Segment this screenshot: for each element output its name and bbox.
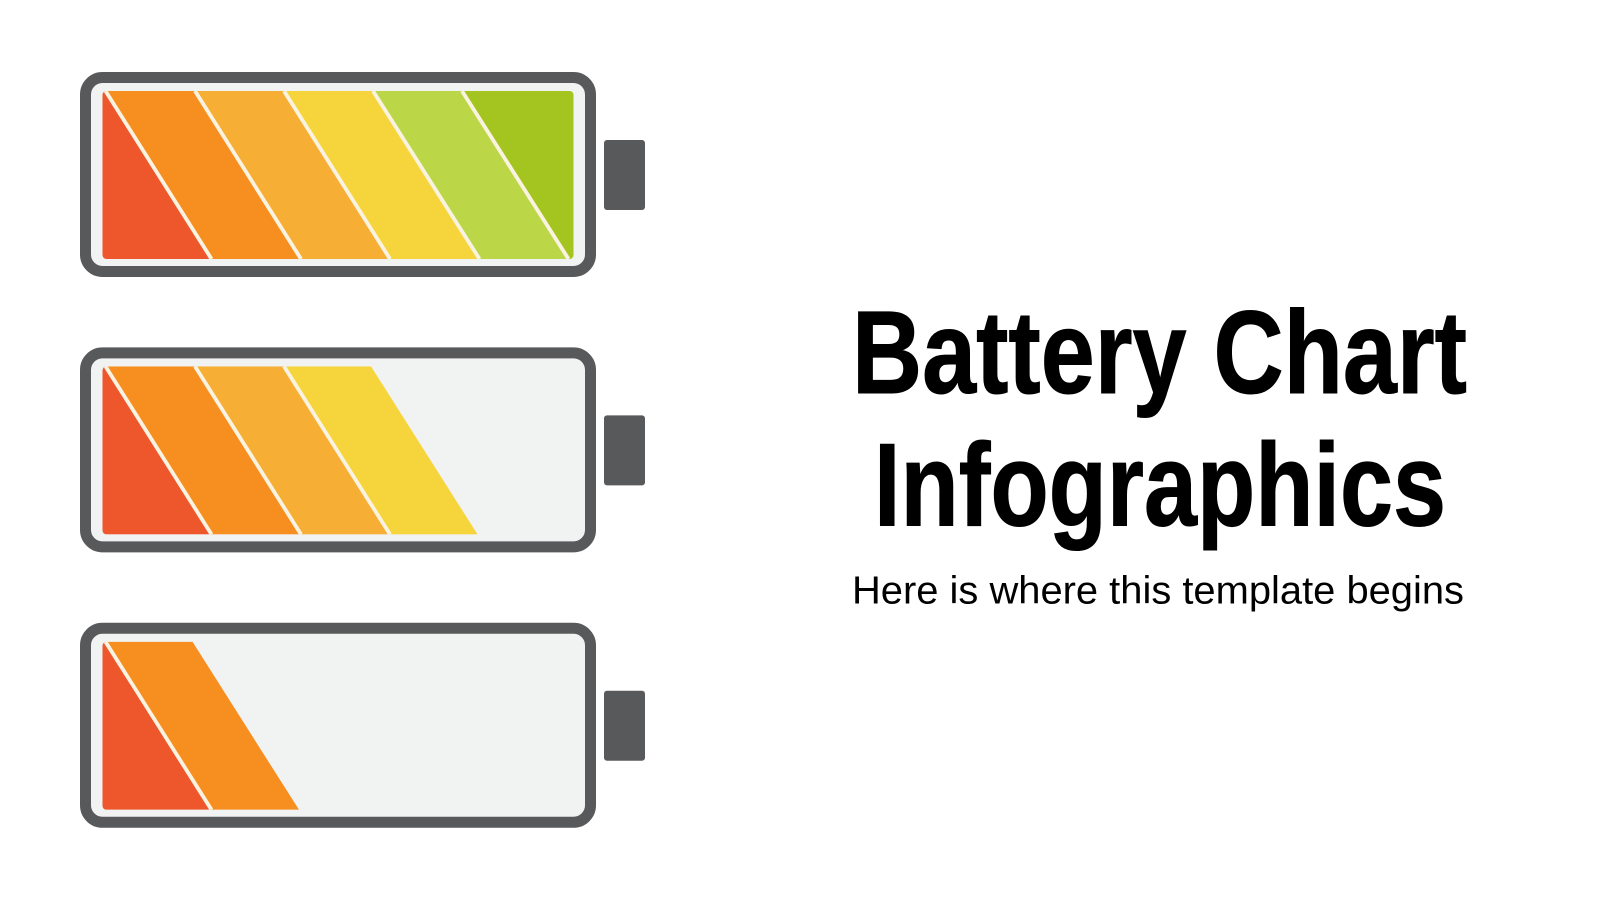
battery: half charge <box>86 353 645 547</box>
subtitle: Here is where this template begins <box>852 570 1464 612</box>
title <box>852 287 1467 552</box>
title: Battery Chart <box>852 287 1467 419</box>
battery: full charge <box>86 78 645 272</box>
battery charts <box>80 72 645 828</box>
battery: low charge <box>86 628 645 822</box>
title: Infographics <box>874 420 1446 552</box>
